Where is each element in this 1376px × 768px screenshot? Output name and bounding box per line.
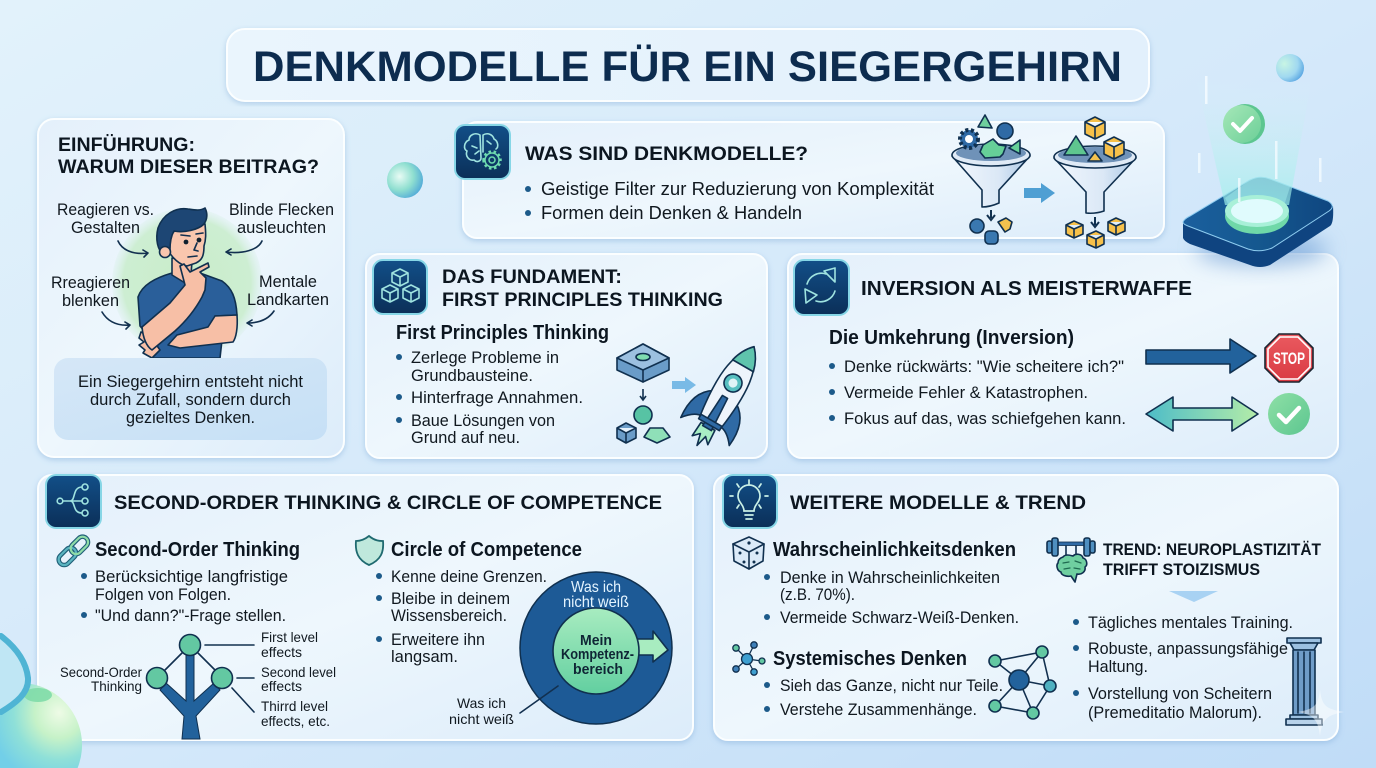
bullet list: Inversion	[829, 357, 1126, 428]
bullet list: Denkmodelle: Formen dein Denken & Handeln	[541, 203, 802, 223]
icon: system nodes small	[733, 642, 765, 675]
bullet list: First Principles: Grund auf neu.	[411, 428, 520, 447]
panel: Weitere Modelle & Trend	[714, 475, 1344, 740]
icon: funnel cubes	[1054, 117, 1136, 248]
bullet list: Denkmodelle: Geistige Filter zur Reduzierung von Komplexität	[541, 179, 934, 199]
subheading: Systemisches Denken: Systemisches Denken	[773, 648, 967, 670]
label: Reagieren vs. Gestalten: Reagieren vs.	[57, 200, 154, 219]
arrow: funnel to funnel	[1024, 183, 1055, 203]
chart: circle of competence: Was ich	[571, 579, 621, 596]
panel: Inversion	[788, 254, 1338, 458]
label: Mentale Landkarten: Mentale	[259, 272, 317, 291]
icon: light bulb	[723, 475, 777, 528]
panel: First Principles	[366, 254, 779, 460]
bullet list: Second-Order: Berücksichtige langfristige	[95, 567, 288, 586]
bullet list: Inversion: Denke rückwärts: "Wie scheitere ich?"	[844, 357, 1124, 376]
bullet list: Circle of Competence: Wissensbereich.	[391, 606, 507, 625]
arrow: block to rocket	[672, 377, 696, 393]
decoration: blue sphere top right	[1276, 54, 1304, 82]
icon: barbell with brain	[1047, 538, 1095, 582]
chart: circle of competence: Mein	[580, 633, 612, 649]
labels: effects tree: effects	[261, 678, 302, 694]
bullet list: First Principles: Zerlege Probleme in	[411, 348, 559, 367]
subheading: Die Umkehrung: Die Umkehrung (Inversion)	[829, 327, 1074, 349]
chart: circle of competence: nicht weiß	[563, 594, 629, 611]
heading: Weitere Modelle: WEITERE MODELLE & TREND	[790, 493, 1086, 514]
bullet list: First Principles: Grundbausteine.	[411, 366, 533, 385]
heading: Second-Order: SECOND-ORDER THINKING & CIRCLE OF COMPETENCE	[114, 493, 662, 514]
labels: effects tree: Thirrd level	[261, 698, 328, 714]
bullet list: First Principles: Baue Lösungen von	[411, 411, 555, 430]
label: outside circle: nicht weiß	[449, 711, 514, 727]
labels: effects tree: Second level	[261, 664, 336, 680]
bullet list: Systemisches: Verstehe Zusammenhänge.	[780, 700, 977, 719]
bullet list: Systemisches	[764, 676, 1003, 719]
chart: circle of competence: Kompetenz-	[561, 647, 634, 663]
bullet list: Circle of Competence: langsam.	[391, 647, 458, 666]
bullet list: Inversion: Fokus auf das, was schiefgehen kann.	[844, 409, 1126, 428]
panel: Second-Order & Circle of Competence	[38, 475, 693, 740]
icon: funnel complex	[952, 115, 1030, 244]
label: Rreagieren blenken: Rreagieren	[51, 273, 130, 292]
bullet list: First Principles: Hinterfrage Annahmen.	[411, 388, 583, 407]
heading: Trend: TREND: NEUROPLASTIZITÄT	[1103, 540, 1322, 559]
icon: rocket	[672, 332, 779, 460]
chart: network	[989, 646, 1056, 719]
arrow: double-headed	[1146, 397, 1258, 431]
label: Mentale Landkarten: Landkarten	[247, 290, 329, 309]
hologram platform with check coin	[1183, 76, 1333, 267]
labels: effects tree: Second-Order	[60, 664, 142, 680]
bullet list: Wahrscheinlichkeit: Denke in Wahrscheinlichkeiten	[780, 568, 1000, 587]
bullet list: Inversion: Vermeide Fehler & Katastrophen.	[844, 383, 1088, 402]
callout: Siegergehirn: gezieltes Denken.	[126, 408, 255, 427]
bullet list: First Principles	[396, 348, 583, 447]
bullet list: Second-Order	[81, 567, 288, 625]
subheading: Second-Order Thinking: Second-Order Thinking	[95, 539, 300, 561]
bullet list: Circle of Competence	[376, 567, 547, 666]
icon: shield	[356, 536, 383, 565]
arrow: toward stop	[1146, 339, 1256, 373]
bullet list: Wahrscheinlichkeit: (z.B. 70%).	[780, 585, 855, 604]
title: DENKMODELLE FÜR EIN SIEGERGEHIRN	[253, 43, 1122, 91]
decoration: glass blob bottom left	[0, 634, 82, 768]
callout: Siegergehirn: Ein Siegergehirn entsteht nicht	[78, 372, 303, 391]
bullet list: Circle of Competence: Kenne deine Grenzen.	[391, 567, 547, 586]
icon: pillar	[1286, 638, 1322, 725]
illustration: thinking man	[112, 208, 262, 358]
subheading: First Principles Thinking: First Principles Thinking	[396, 322, 609, 344]
icon: check circle	[1268, 393, 1310, 435]
icon: chain link	[56, 534, 90, 567]
bullet list: Trend: Vorstellung von Scheitern	[1088, 684, 1272, 703]
label: Blinde Flecken ausleuchten: ausleuchten	[237, 218, 326, 237]
chart: effects tree	[60, 629, 336, 739]
bullet list: Trend: (Premeditatio Malorum).	[1088, 703, 1262, 722]
bullet list: Circle of Competence: Bleibe in deinem	[391, 589, 510, 608]
bullet list: Second-Order: "Und dann?"-Frage stellen.	[95, 606, 286, 625]
icon: cubes	[373, 260, 427, 314]
labels: effects tree: First level	[261, 629, 318, 645]
arrow: down triangle	[1169, 591, 1218, 602]
bullet list: Systemisches: Sieh das Ganze, nicht nur Teile.	[780, 676, 1003, 695]
heading: Einführung: WARUM DIESER BEITRAG?	[58, 157, 319, 178]
callout: Siegergehirn	[54, 358, 327, 440]
heading: Einführung: EINFÜHRUNG:	[58, 135, 195, 156]
icon: stop sign	[1265, 334, 1313, 382]
labels: effects tree: effects, etc.	[261, 713, 330, 729]
label: Blinde Flecken ausleuchten: Blinde Flecken	[229, 200, 334, 219]
icon: stop sign: STOP	[1273, 349, 1305, 368]
bullet list: Trend: Robuste, anpassungsfähige	[1088, 639, 1288, 658]
bullet list: Trend	[1073, 613, 1293, 722]
decoration: sparkle	[1298, 690, 1344, 736]
callout: Siegergehirn: durch Zufall, sondern durch	[90, 390, 291, 409]
arrows to the man	[102, 241, 274, 329]
icon: branching nodes	[46, 475, 101, 528]
label: Rreagieren blenken: blenken	[62, 291, 119, 310]
label: outside circle: Was ich	[457, 695, 506, 711]
chart: circle of competence: bereich	[573, 662, 623, 678]
bullet list: Trend: Haltung.	[1088, 657, 1148, 676]
icon: brain with gear	[455, 125, 510, 179]
subheading: Wahrscheinlichkeitsdenken: Wahrscheinlichkeitsdenken	[773, 539, 1016, 561]
icon: refresh arrows	[794, 260, 849, 315]
heading: Was sind Denkmodelle: WAS SIND DENKMODELLE?	[525, 144, 808, 165]
icon: block decomposed	[617, 344, 670, 443]
labels: effects tree: Thinking	[91, 678, 142, 694]
subheading: Circle of Competence: Circle of Competence	[391, 539, 582, 561]
bullet list: Wahrscheinlichkeit: Vermeide Schwarz-Weiß-Denken.	[780, 608, 1019, 627]
title	[227, 29, 1149, 101]
decoration: teal sphere	[387, 162, 423, 198]
bullet list: Trend: Tägliches mentales Training.	[1088, 613, 1293, 632]
panel: Was sind Denkmodelle	[455, 115, 1164, 248]
labels: effects tree: effects	[261, 644, 302, 660]
label: Reagieren vs. Gestalten: Gestalten	[71, 218, 140, 237]
heading: First Principles: DAS FUNDAMENT:	[442, 267, 622, 288]
heading: Inversion: INVERSION ALS MEISTERWAFFE	[861, 278, 1192, 300]
panel: Einführung	[38, 119, 344, 457]
bullet list: Denkmodelle	[525, 179, 934, 223]
heading: First Principles: FIRST PRINCIPLES THINKING	[442, 290, 723, 311]
bullet list: Wahrscheinlichkeit	[764, 568, 1019, 627]
heading: Trend: TRIFFT STOIZISMUS	[1103, 560, 1260, 579]
icon: dice	[733, 537, 764, 569]
bullet list: Circle of Competence: Erweitere ihn	[391, 630, 485, 649]
chart: circle of competence	[449, 572, 672, 727]
bullet list: Second-Order: Folgen von Folgen.	[95, 585, 231, 604]
